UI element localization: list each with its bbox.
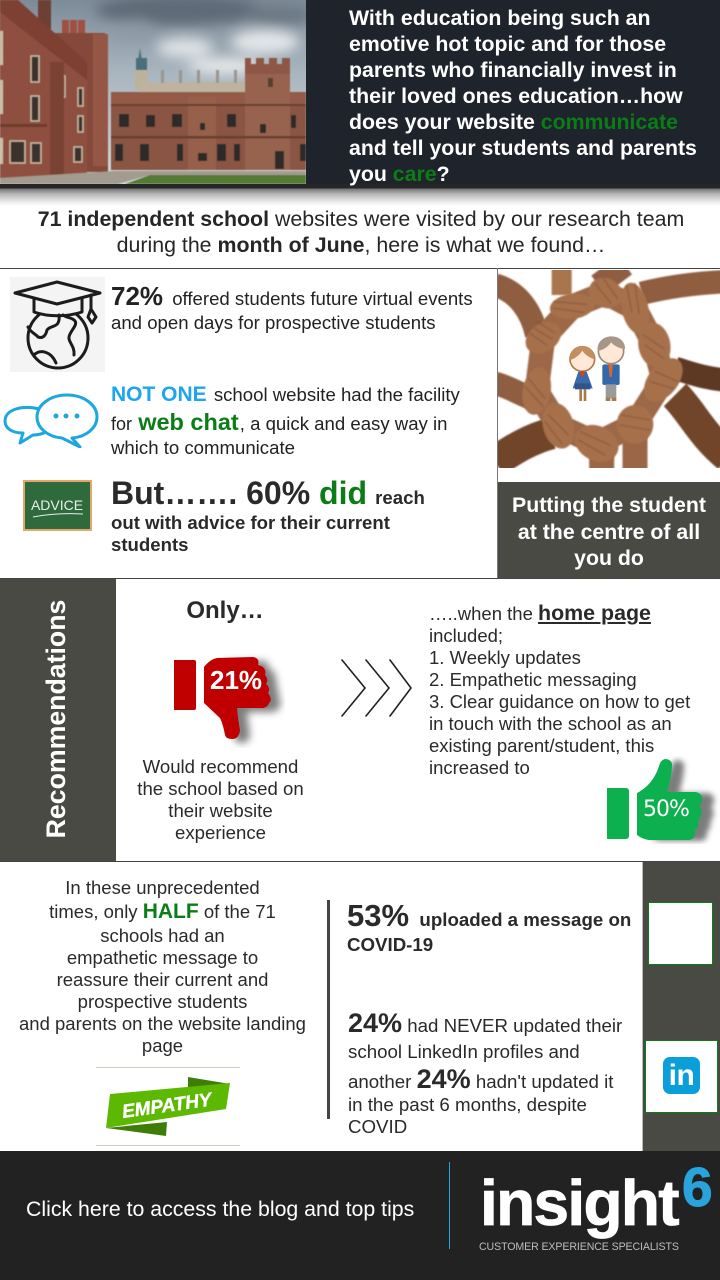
icon: chat bubbles [4, 394, 98, 448]
heading: main question: does your website communicate [349, 110, 678, 134]
logo: insight6: CUSTOMER EXPERIENCE SPECIALISTS [479, 1241, 679, 1253]
section rule lower [0, 861, 720, 862]
text: half of the 71 schools: schools had an [100, 925, 225, 946]
header divider with shadow [0, 184, 720, 206]
stat: 53% covid message [347, 898, 631, 955]
text: half of the 71 schools: times, only HALF of the 71 [49, 900, 276, 923]
text: would recommend: experience [175, 822, 266, 843]
footer link text: Click here to access the blog and top tips [26, 1197, 414, 1221]
hand shading [525, 278, 678, 455]
panel: recommendations side label: Recommendations [41, 600, 71, 838]
stat: 24% linkedin profiles: in the past 6 months, despite [348, 1094, 587, 1115]
stat: 60% reached out with advice: students [111, 534, 188, 555]
chimney and tower behind wing [38, 0, 51, 30]
footer divider [449, 1162, 450, 1249]
text: home page recommendations: existing parent/student, this [429, 735, 654, 756]
logo: insight6 [479, 1156, 713, 1253]
footer panel [0, 1151, 720, 1280]
icon: red thumbs down 21% [174, 656, 285, 748]
intro text [38, 207, 684, 257]
text: half of the 71 schools: In these unprecedented [65, 877, 260, 898]
heading: main question: their loved ones education…how [349, 84, 683, 108]
blank white box [648, 902, 713, 965]
text: home page recommendations: included; [429, 625, 503, 646]
left wing [0, 3, 87, 183]
stat: 72% virtual events: and open days for prospective students [111, 312, 436, 333]
label: 50%: 50% [643, 797, 689, 822]
logo: insight6: 6 [682, 1156, 713, 1218]
icon: graduation cap on globe [10, 277, 105, 372]
text: would recommend: their website [168, 800, 273, 821]
icon: linkedin: in [669, 1059, 694, 1092]
windows [115, 78, 306, 169]
text: would recommend [137, 756, 304, 843]
text: home page recommendations: 2. Empathetic messaging [429, 669, 637, 690]
photo: linked hands around students [498, 270, 720, 468]
stat: no web chat: which to communicate [111, 437, 295, 458]
logo: insight6: insight [480, 1167, 678, 1239]
main range [111, 94, 306, 170]
text: would recommend: the school based on [137, 778, 304, 799]
stat: 24% linkedin profiles: school LinkedIn profiles and [348, 1041, 580, 1062]
hands ring [519, 272, 691, 469]
continuous ring of wrists [537, 293, 663, 443]
text: home page recommendations [429, 601, 690, 778]
icon: green thumbs up 50% [607, 756, 718, 844]
ground [0, 171, 306, 184]
text: would recommend: Would recommend [143, 756, 298, 777]
stat: 53% covid message: COVID-19 [347, 934, 433, 955]
intro text: during the month of June, here is what we found… [117, 233, 605, 257]
stat: 24% linkedin profiles: 24% had NEVER updated their [348, 1008, 622, 1038]
gatehouse tower [245, 66, 290, 170]
stat: no web chat [111, 383, 460, 458]
panel: putting the student at the centre [498, 482, 720, 578]
badge: empathy ribbon [96, 1067, 240, 1146]
header photo: school building [0, 0, 306, 184]
panel: putting the student at the centre: you do [574, 546, 644, 570]
label: 21%: 21% [210, 665, 262, 695]
stat: 53% covid message: 53% uploaded a message on [347, 898, 631, 933]
text: home page recommendations: 1. Weekly updates [429, 647, 581, 668]
stat: 72% virtual events: 72% offered students future virtual events [111, 281, 473, 311]
students [570, 336, 625, 401]
arrow: triple chevrons [341, 659, 412, 717]
heading: main question: emotive hot topic and for those [349, 32, 666, 56]
outer arms [532, 265, 592, 295]
stat: no web chat: for web chat, a quick and easy way in [111, 409, 448, 435]
icon: advice chalkboard: ADVICE [31, 497, 83, 513]
stat: 24% linkedin profiles: COVID [348, 1116, 407, 1137]
stat: 24% linkedin profiles [348, 1008, 622, 1137]
badge: empathy ribbon: EMPATHY [121, 1089, 215, 1123]
panel: putting the student at the centre: at the centre of all [518, 520, 700, 544]
panel: putting the student at the centre: Putting the student [512, 493, 706, 517]
heading: only: Only… [186, 597, 264, 624]
panel: recommendations side label [0, 579, 116, 862]
text: home page recommendations: increased to [429, 757, 530, 778]
stat: 60% reached out with advice: out with advice for their current [111, 512, 390, 533]
icon: advice chalkboard [23, 480, 92, 531]
text: home page recommendations: 3. Clear guidance on how to get [429, 691, 690, 712]
text: half of the 71 schools [19, 877, 306, 1056]
heading: main question: With education being such an [349, 6, 651, 30]
text: home page recommendations: in touch with the school as an [429, 713, 672, 734]
stat: 72% virtual events [111, 281, 473, 333]
vertical divider [327, 900, 330, 1119]
text: half of the 71 schools: page [142, 1035, 183, 1056]
intro text: 71 independent school websites were visited by our research team [38, 207, 684, 231]
stat: no web chat: NOT ONE school website had the facility [111, 383, 460, 406]
spire and back hall [138, 48, 142, 60]
stat: 60% reached out with advice: But……. 60% did reach [111, 475, 425, 511]
text: home page recommendations: …..when the home page [429, 601, 651, 625]
text: half of the 71 schools: prospective students [78, 991, 247, 1012]
heading: main question: you care? [349, 162, 450, 186]
left vertical rule [497, 268, 498, 579]
panel: right side dark strip [642, 862, 720, 1151]
text: half of the 71 schools: empathetic message to [67, 947, 258, 968]
heading: main question [349, 6, 697, 186]
header panel: dark background [306, 0, 720, 184]
icon: linkedin [645, 1040, 718, 1113]
section rule top [0, 268, 720, 269]
text: half of the 71 schools: and parents on the website landing [19, 1013, 306, 1034]
section rule middle [0, 578, 720, 579]
text: half of the 71 schools: reassure their current and [57, 969, 268, 990]
stat: 24% linkedin profiles: another 24% hadn't updated it [348, 1064, 613, 1094]
stat: 60% reached out with advice [111, 475, 425, 555]
heading: main question: and tell your students and parents [349, 136, 697, 160]
heading: main question: parents who financially invest in [349, 58, 677, 82]
